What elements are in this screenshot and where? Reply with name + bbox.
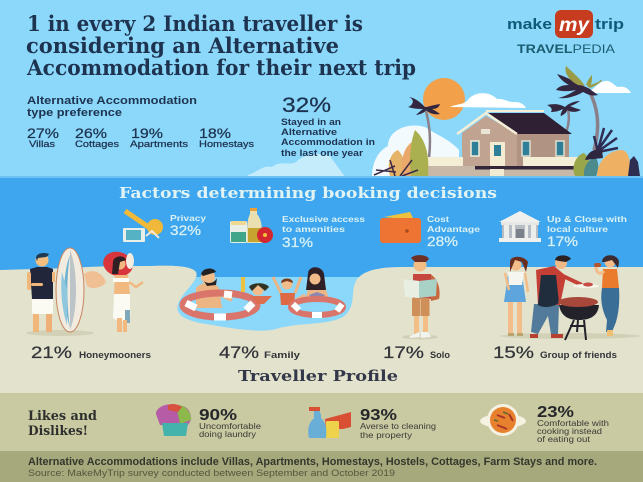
villas stat: Villas (29, 139, 55, 150)
family stat (219, 343, 301, 362)
title: 1 in every 2 Indian traveller is (27, 11, 363, 36)
amenities label: Exclusive access (282, 214, 365, 224)
cost label: 28% (427, 233, 458, 249)
cleaning label: the property (360, 430, 413, 440)
laundry label (199, 407, 261, 439)
group of friends stat (493, 343, 617, 362)
solo stat (383, 343, 450, 362)
apartments stat: 19% (131, 125, 163, 141)
footer note: Alternative Accommodations include Villas, Apartments, Homestays, Hostels, Cottages, Farm Stays and more. (28, 456, 597, 468)
friend with drink (504, 257, 528, 336)
cottages stat: Cottages (75, 139, 119, 150)
factor: cost advantage (380, 212, 480, 249)
icon: spray bottle and sponge (308, 407, 351, 438)
factor: local culture (499, 211, 627, 249)
privacy label (170, 213, 206, 238)
right window two (556, 141, 564, 156)
left bushes (374, 130, 428, 176)
house walls (462, 116, 569, 167)
32 percent stayed callout: the last one year (281, 148, 363, 159)
icon: jars and flower (230, 208, 273, 243)
title: Accommodation for their next trip (26, 55, 416, 80)
right bushes (573, 128, 640, 176)
cottages stat: 26% (75, 125, 107, 141)
title (26, 11, 416, 80)
cooking label: cooking instead (537, 426, 602, 436)
homestays stat: 18% (199, 125, 231, 141)
sky background (0, 0, 643, 178)
laundry label: 90% (199, 407, 237, 424)
left window (471, 141, 479, 156)
shadow (26, 330, 94, 336)
family stat: Family (264, 350, 301, 361)
laundry item (156, 404, 261, 439)
32 percent stayed callout: 32% (282, 94, 331, 117)
likes and dislikes heading (28, 409, 97, 439)
right railing (523, 157, 579, 166)
accommodation type preference (27, 95, 254, 150)
title: considering an Alternative (26, 33, 339, 58)
palm trees (408, 66, 602, 158)
honeymooners illustration (26, 248, 143, 336)
beach ball and bag (84, 271, 106, 288)
cost label (427, 214, 480, 249)
homestays stat (199, 125, 254, 150)
man grilling (530, 255, 599, 338)
homestays stat: Homestays (199, 139, 254, 150)
roof (487, 113, 572, 134)
cleaning label: Averse to cleaning (360, 421, 436, 431)
group of friends stat: Group of friends (540, 350, 617, 361)
villas stat: 27% (27, 125, 59, 141)
preference heading (27, 95, 197, 119)
woman (100, 249, 143, 332)
laundry label: doing laundry (199, 429, 257, 439)
cooking label (537, 404, 609, 444)
icon: curry dish (480, 404, 526, 436)
father (196, 268, 232, 308)
logo: MakeMyTrip Travelpedia: TRAVEL PEDIA (517, 44, 615, 56)
icon: key (123, 211, 163, 242)
icon: laundry basket (156, 404, 191, 436)
icon: wallet (380, 212, 421, 243)
sand with pool cut-out (0, 266, 643, 394)
group of friends illustration (500, 255, 640, 340)
cost label: Advantage (427, 224, 480, 234)
right window one (522, 141, 530, 156)
32 percent stayed callout: Alternative (281, 127, 337, 138)
footer band (0, 451, 643, 482)
gable trim (457, 113, 517, 134)
32 percent stayed callout: Accommodation in (281, 137, 375, 148)
cleaning item (308, 407, 436, 440)
mother (296, 267, 330, 302)
friend eating (594, 255, 619, 336)
father's float ring (183, 293, 257, 317)
honeymooners stat: Honeymooners (79, 350, 151, 361)
likes and dislikes heading: Likes and (28, 409, 97, 424)
culture label: 17% (547, 233, 578, 249)
32 percent stayed callout: Stayed in an (281, 117, 341, 128)
man (27, 253, 55, 332)
amenities label: 31% (282, 234, 313, 250)
cooking item (480, 404, 609, 444)
son (273, 277, 301, 305)
sea band (0, 177, 643, 277)
door (490, 142, 505, 166)
logo: MakeMyTrip Travelpedia (507, 10, 624, 56)
surfboard (56, 248, 84, 332)
family illustration (183, 267, 343, 317)
logo: MakeMyTrip Travelpedia: trip (595, 16, 624, 33)
villas stat (27, 125, 59, 150)
cooking label: 23% (537, 404, 574, 421)
logo: MakeMyTrip Travelpedia: make (507, 16, 552, 33)
preference heading: type preference (27, 107, 122, 119)
likes and dislikes band (0, 393, 643, 451)
source line: Source: MakeMyTrip survey conducted between September and October 2019 (28, 468, 395, 479)
honeymooners stat (31, 343, 151, 362)
culture label: Up & Close with (547, 214, 627, 224)
traveller profile heading: Traveller Profile (238, 367, 398, 385)
32 percent stayed callout (281, 94, 375, 159)
clouds (248, 81, 631, 177)
cooking label: Comfortable with (537, 418, 609, 428)
mother's float ring (291, 299, 343, 315)
privacy label: 32% (170, 222, 201, 238)
apartments stat (130, 125, 188, 150)
factor: privacy (123, 211, 206, 242)
cleaning label (360, 407, 436, 440)
likes and dislikes heading: Dislikes! (28, 424, 88, 439)
attic window (481, 129, 490, 134)
amenities label (282, 214, 365, 250)
cooking label: of eating out (537, 434, 591, 444)
logo: MakeMyTrip Travelpedia: my (559, 15, 591, 36)
privacy label: Privacy (170, 213, 206, 223)
solo stat: 17% (383, 343, 424, 362)
platform (422, 166, 582, 176)
family stat: 47% (219, 343, 259, 362)
laundry label: Uncomfortable (199, 421, 261, 431)
honeymooners stat: 21% (31, 343, 72, 362)
culture label (547, 214, 627, 249)
icon: bank building (499, 211, 541, 242)
group of friends stat: 15% (493, 343, 534, 362)
apartments stat: Apartments (130, 139, 188, 150)
culture label: local culture (547, 224, 608, 234)
preference heading: Alternative Accommodation (27, 95, 197, 107)
cottages stat (75, 125, 119, 150)
cleaning label: 93% (360, 407, 397, 424)
left railing (427, 157, 463, 166)
grill (558, 297, 599, 340)
factor: amenities (230, 208, 365, 250)
amenities label: to amenities (282, 224, 345, 234)
solo traveller illustration (402, 255, 440, 340)
cost label: Cost (427, 214, 449, 224)
factors heading: Factors determining booking decisions (119, 184, 497, 202)
house (422, 110, 582, 177)
daughter (243, 277, 272, 304)
sun (423, 78, 465, 120)
solo stat: Solo (430, 350, 450, 361)
